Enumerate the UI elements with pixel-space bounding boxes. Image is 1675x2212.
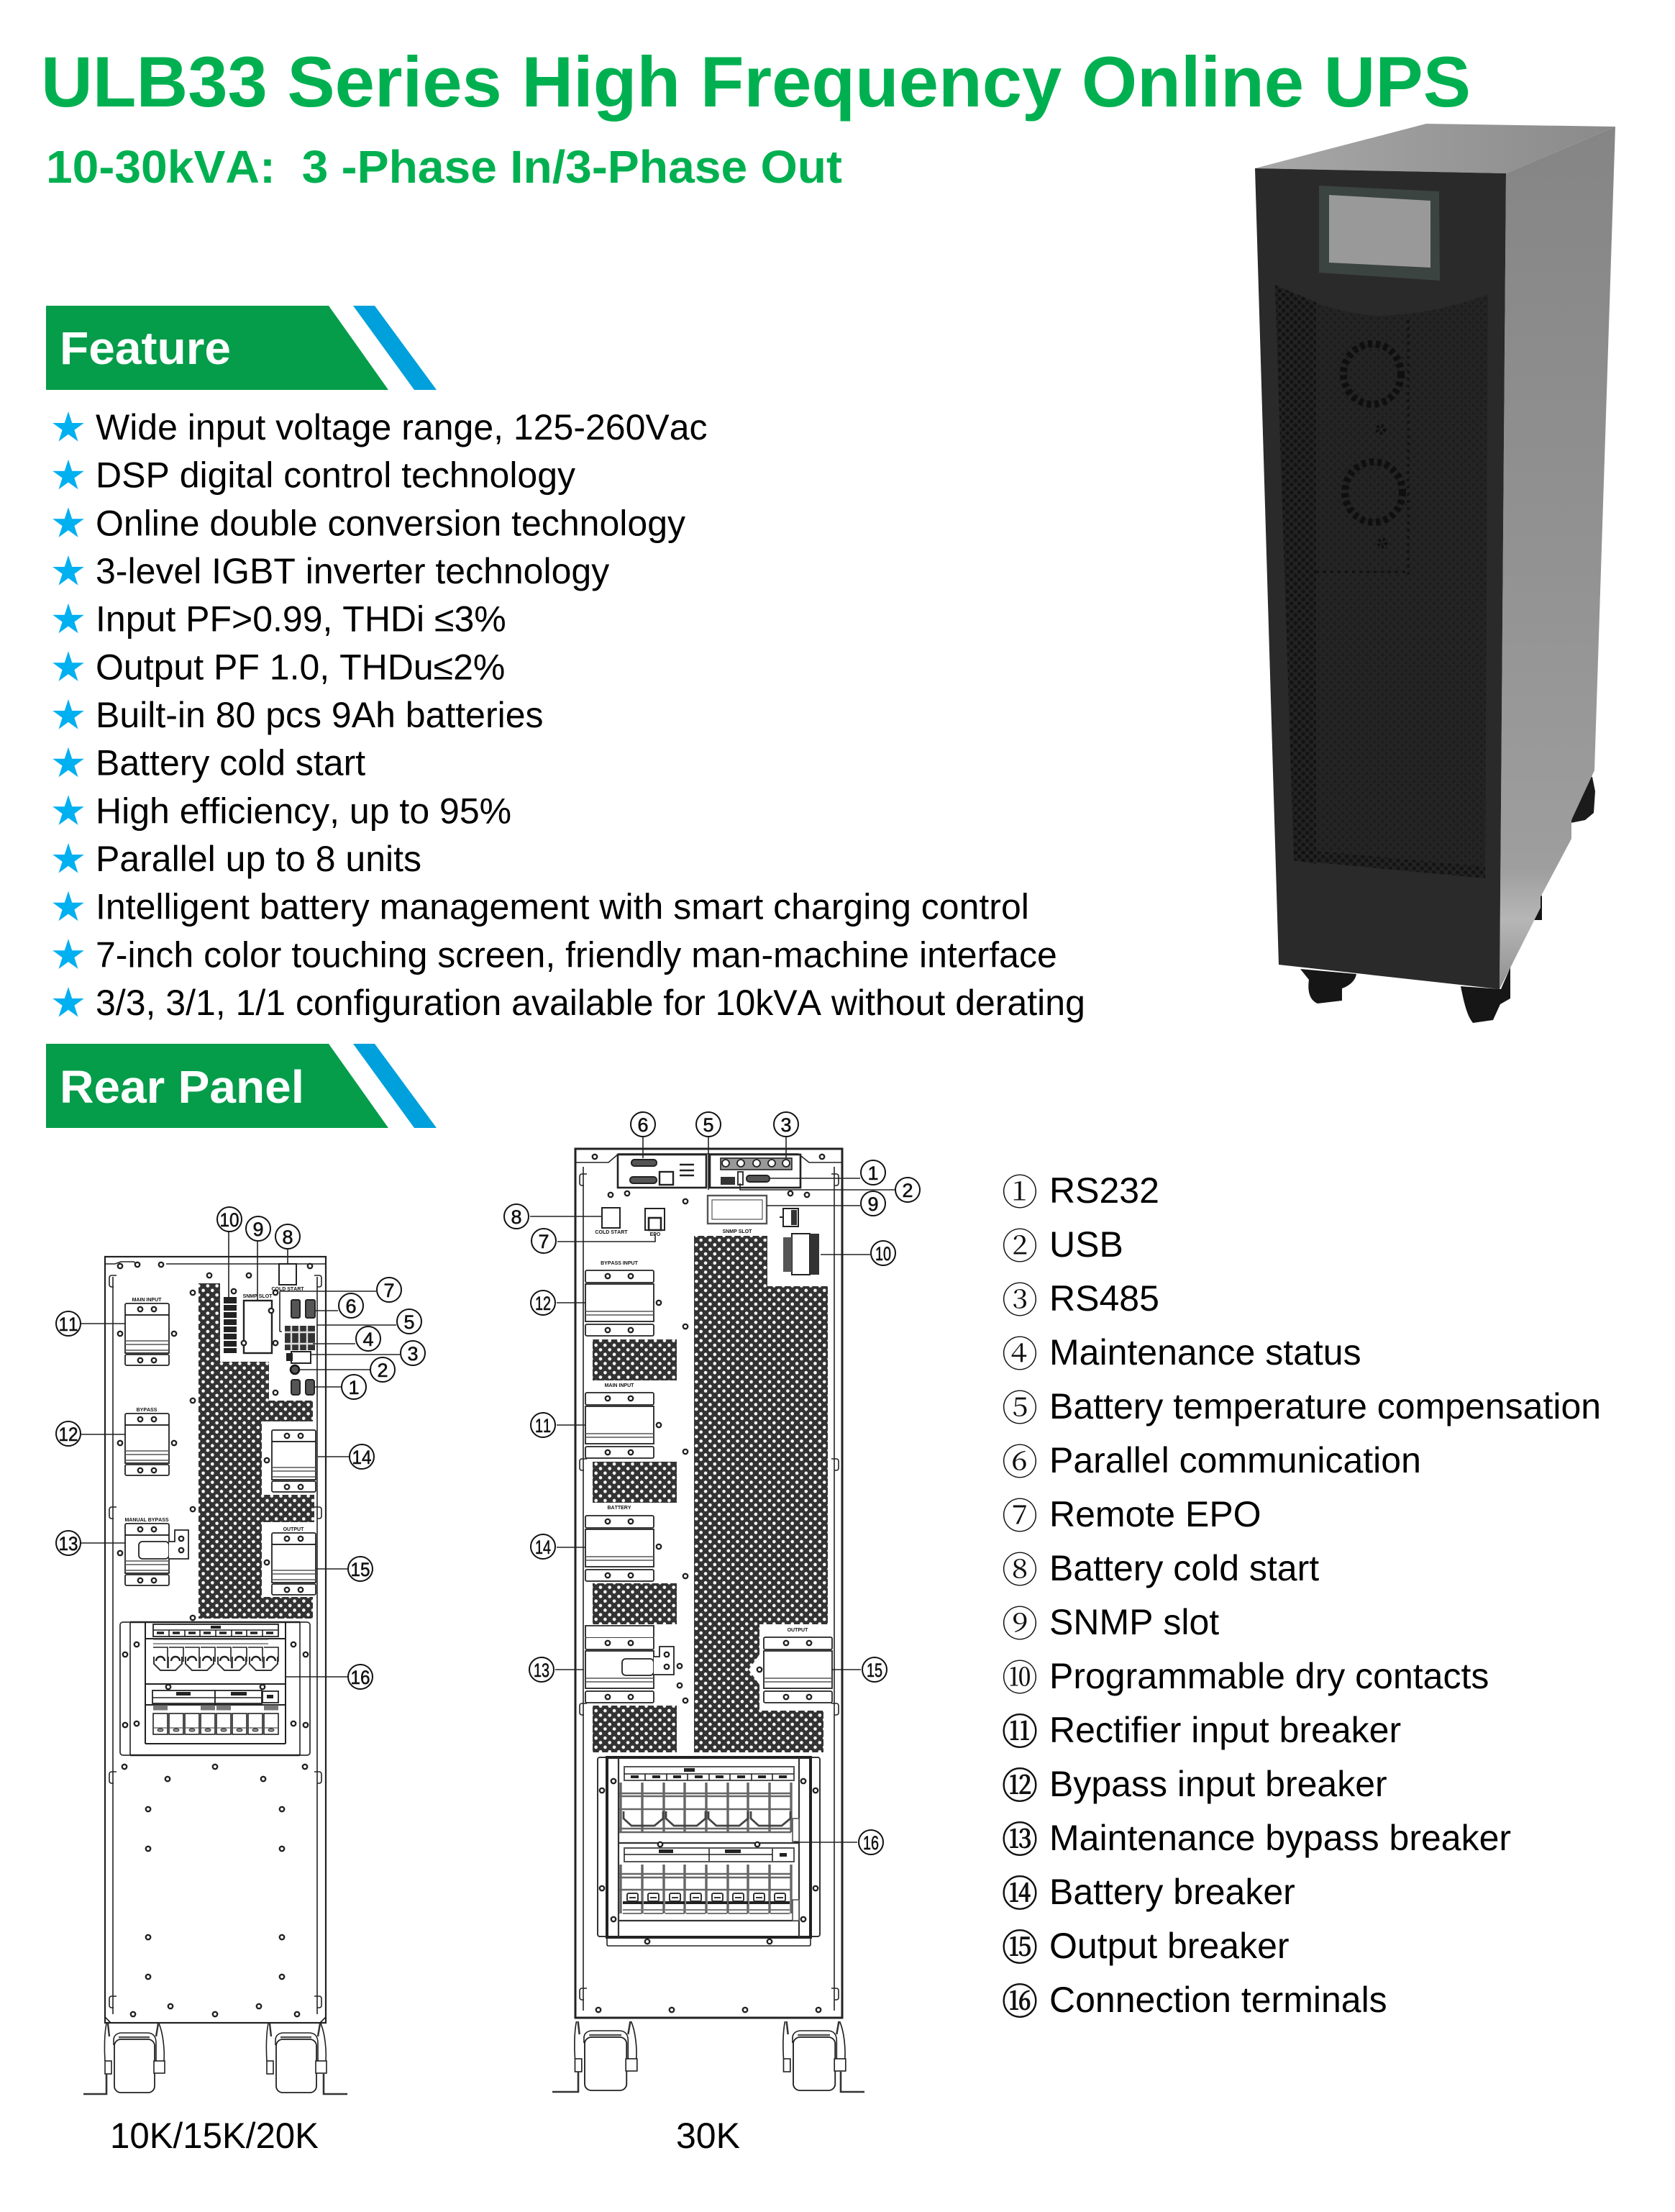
- diagram: 30K rear panel: 10: [875, 1243, 891, 1265]
- callout numbers: [56, 1207, 425, 1689]
- subtitle: 10-30kVA: 3 -Phase In/3-Phase Out: [46, 141, 842, 193]
- legend item 4: Maintenance status: [1049, 1332, 1361, 1373]
- diagram: 30K rear panel: 5: [703, 1114, 714, 1136]
- diagram: 30K rear panel: 8: [511, 1206, 522, 1228]
- fans: [1343, 344, 1402, 547]
- diagram: 10K/15K/20K rear panel: 10: [220, 1209, 239, 1231]
- legend item 3: ③: [1002, 1272, 1038, 1324]
- breakers: [124, 1298, 316, 1595]
- legend item 2: ②: [1002, 1218, 1038, 1270]
- communication ports: SNMP SLOT: [723, 1229, 752, 1234]
- diagram: 30K rear panel: 3: [780, 1114, 792, 1136]
- diagram: 30K rear panel: 9: [867, 1193, 879, 1215]
- legend item 9: SNMP slot: [1049, 1602, 1219, 1642]
- legend item 6: ⑥: [1002, 1434, 1038, 1485]
- breakers: OUTPUT: [283, 1527, 304, 1532]
- legend item 12: Bypass input breaker: [1049, 1764, 1387, 1804]
- legend item 16: ⑯: [1002, 1973, 1038, 2025]
- diagram: 10K/15K/20K rear panel: 15: [351, 1559, 370, 1580]
- heading: Feature banner: [46, 306, 437, 390]
- diagram: 10K/15K/20K rear panel: 11: [59, 1314, 78, 1335]
- legend item 4: [1002, 1326, 1361, 1378]
- legend item 14: Battery breaker: [1049, 1872, 1295, 1912]
- legend item 3: [1002, 1272, 1159, 1324]
- legend item 6: [1002, 1434, 1421, 1485]
- diagram: 10K/15K/20K rear panel: [56, 1207, 425, 2156]
- legend item 10: ⑩: [1002, 1649, 1038, 1701]
- communication ports: [224, 1264, 315, 1395]
- diagram: 10K/15K/20K rear panel: 5: [403, 1311, 415, 1333]
- legend item 10: Programmable dry contacts: [1049, 1656, 1489, 1696]
- diagram: 10K/15K/20K rear panel: 8: [282, 1226, 293, 1248]
- feature item: efficiency: High efficiency, up to 95%: [96, 791, 511, 831]
- callout numbers: [504, 1112, 920, 1854]
- legend item 11: Rectifier input breaker: [1049, 1710, 1401, 1750]
- legend item 7: Remote EPO: [1049, 1494, 1261, 1534]
- legend item 2: USB: [1049, 1224, 1123, 1265]
- legend item 5: ⑤: [1002, 1380, 1038, 1432]
- legend item 3: RS485: [1049, 1278, 1159, 1319]
- casters and feet: [83, 2024, 347, 2094]
- diagram: 30K rear panel: 13: [534, 1660, 549, 1681]
- connection terminal panel: [598, 1757, 820, 1946]
- cabinet outline: [575, 1149, 842, 2018]
- connection terminal panel: [120, 1622, 310, 1755]
- feature item: battery management: Intelligent battery management with smart charging control: [96, 887, 1029, 927]
- breakers: OUTPUT: [788, 1628, 808, 1633]
- diagram: 10K/15K/20K rear panel: 4: [362, 1329, 374, 1350]
- legend item 15: Output breaker: [1049, 1926, 1290, 1966]
- diagram: 30K rear panel: 6: [637, 1114, 649, 1136]
- breakers: BYPASS INPUT: [601, 1261, 639, 1266]
- diagram: 10K/15K/20K rear panel: 16: [351, 1667, 370, 1688]
- breakers: BYPASS: [137, 1408, 158, 1413]
- heading: Feature banner: Feature: [60, 322, 231, 374]
- feature item: configuration: 3/3, 3/1, 1/1 configuration available for 10kVA without derating: [96, 983, 1085, 1023]
- legend item 6: Parallel communication: [1049, 1440, 1421, 1480]
- front face: [1255, 168, 1506, 989]
- casters and feet: [552, 2021, 864, 2092]
- diagram: 10K/15K/20K rear panel: 3: [407, 1343, 419, 1365]
- product image: UPS cabinet: [1255, 124, 1615, 1023]
- legend item 4: ④: [1002, 1326, 1038, 1378]
- legend item 12: ⑫: [1002, 1757, 1038, 1809]
- leader lines: [530, 1135, 895, 1842]
- feature item: touch screen: 7-inch color touching screen, friendly man-machine interface: [96, 934, 1057, 975]
- diagram: 10K/15K/20K rear panel: 12: [59, 1424, 78, 1445]
- leader lines: [81, 1231, 400, 1677]
- legend item 7: [1002, 1488, 1261, 1539]
- feature item: DSP: DSP digital control technology: [96, 455, 575, 496]
- legend item 1: RS232: [1049, 1170, 1159, 1211]
- heading: Rear Panel banner: [46, 1044, 437, 1128]
- legend item 1: ①: [1002, 1164, 1038, 1216]
- caption: 30K: [676, 2116, 740, 2156]
- legend item 8: [1002, 1542, 1319, 1593]
- legend item 16: [1002, 1973, 1387, 2025]
- diagram: 30K rear panel: 7: [538, 1231, 549, 1252]
- feature item: batteries: Built-in 80 pcs 9Ah batteries: [96, 695, 544, 735]
- heading: Rear Panel banner: Rear Panel: [60, 1061, 304, 1113]
- legend item 15: [1002, 1919, 1290, 1971]
- mounting screws: [593, 1155, 824, 2012]
- legend item 14: ⑭: [1002, 1865, 1038, 1917]
- feature item: input voltage: Wide input voltage range, 125-260Vac: [96, 407, 708, 447]
- diagram: 30K rear panel: 11: [535, 1415, 551, 1437]
- communication ports: COLD START: [271, 1287, 304, 1292]
- legend item 15: ⑮: [1002, 1919, 1038, 1971]
- rear casters: [1529, 777, 1595, 920]
- legend item 9: ⑨: [1002, 1596, 1038, 1647]
- legend list: [1002, 1164, 1601, 2025]
- feature item: cold start: Battery cold start: [96, 743, 365, 783]
- diagram: 10K/15K/20K rear panel: 1: [348, 1377, 360, 1398]
- diagram: 10K/15K/20K rear panel: 2: [377, 1360, 388, 1381]
- diagram: 30K rear panel: 14: [535, 1537, 551, 1558]
- feature item: IGBT: 3-level IGBT inverter technology: [96, 551, 609, 591]
- legend item 5: Battery temperature compensation: [1049, 1386, 1601, 1426]
- legend item 11: ⑪: [1002, 1703, 1038, 1755]
- diagram: 10K/15K/20K rear panel: 7: [383, 1280, 395, 1301]
- mounting screws: [118, 1262, 312, 2016]
- diagram: 30K rear panel: 1: [867, 1162, 879, 1184]
- legend item 1: [1002, 1164, 1159, 1216]
- communication ports: COLD START: [595, 1230, 628, 1235]
- communication ports: EPO: [650, 1232, 661, 1237]
- legend item 7: ⑦: [1002, 1488, 1038, 1539]
- diagram: 30K rear panel: [504, 1112, 920, 2156]
- breakers: MANUAL BYPASS: [124, 1518, 169, 1523]
- breakers: MAIN INPUT: [132, 1298, 162, 1303]
- diagram: 10K/15K/20K rear panel: 6: [345, 1296, 357, 1317]
- display bezel and screen: [1319, 186, 1440, 281]
- diagram: 10K/15K/20K rear panel: 9: [252, 1219, 264, 1240]
- legend item 13: Maintenance bypass breaker: [1049, 1818, 1511, 1858]
- legend item 8: ⑧: [1002, 1542, 1038, 1593]
- front casters: [1300, 968, 1510, 1023]
- legend item 11: [1002, 1703, 1401, 1755]
- caption: 10K/15K/20K: [110, 2116, 319, 2156]
- legend item 8: Battery cold start: [1049, 1548, 1319, 1588]
- diagram: 30K rear panel: 12: [535, 1293, 551, 1314]
- perforated mesh: [1275, 285, 1488, 878]
- legend item 9: [1002, 1596, 1219, 1647]
- diagram: 30K rear panel: 15: [867, 1660, 882, 1681]
- legend item 13: ⑬: [1002, 1811, 1038, 1863]
- title: ULB33 Series High Frequency Online UPS: [41, 42, 1471, 122]
- feature item: input PF: Input PF>0.99, THDi ≤3%: [96, 599, 506, 640]
- legend item 2: [1002, 1218, 1123, 1270]
- diagram: 30K rear panel: 16: [863, 1832, 879, 1854]
- communication ports: SNMP SLOT: [243, 1294, 273, 1299]
- cabinet outline: [105, 1257, 326, 2023]
- feature list: [53, 407, 1085, 1023]
- legend item 14: [1002, 1865, 1295, 1917]
- communication ports: [595, 1155, 819, 1275]
- ventilation mesh: [198, 1283, 314, 1619]
- legend item 12: [1002, 1757, 1387, 1809]
- diagram: 10K/15K/20K rear panel: 14: [352, 1447, 371, 1468]
- feature item: parallel: Parallel up to 8 units: [96, 839, 421, 879]
- feature item: double conversion: Online double conversion technology: [96, 503, 685, 543]
- breakers: BATTERY: [607, 1506, 631, 1511]
- breakers: MAIN INPUT: [605, 1383, 634, 1388]
- breakers: [585, 1261, 832, 1703]
- ventilation mesh: [593, 1236, 828, 1752]
- feature item: output PF: Output PF 1.0, THDu≤2%: [96, 647, 505, 687]
- legend item 16: Connection terminals: [1049, 1980, 1387, 2020]
- side face: [1500, 127, 1615, 989]
- diagram: 30K rear panel: 2: [902, 1180, 913, 1201]
- top face: [1255, 124, 1615, 173]
- diagram: 10K/15K/20K rear panel: 13: [59, 1533, 78, 1555]
